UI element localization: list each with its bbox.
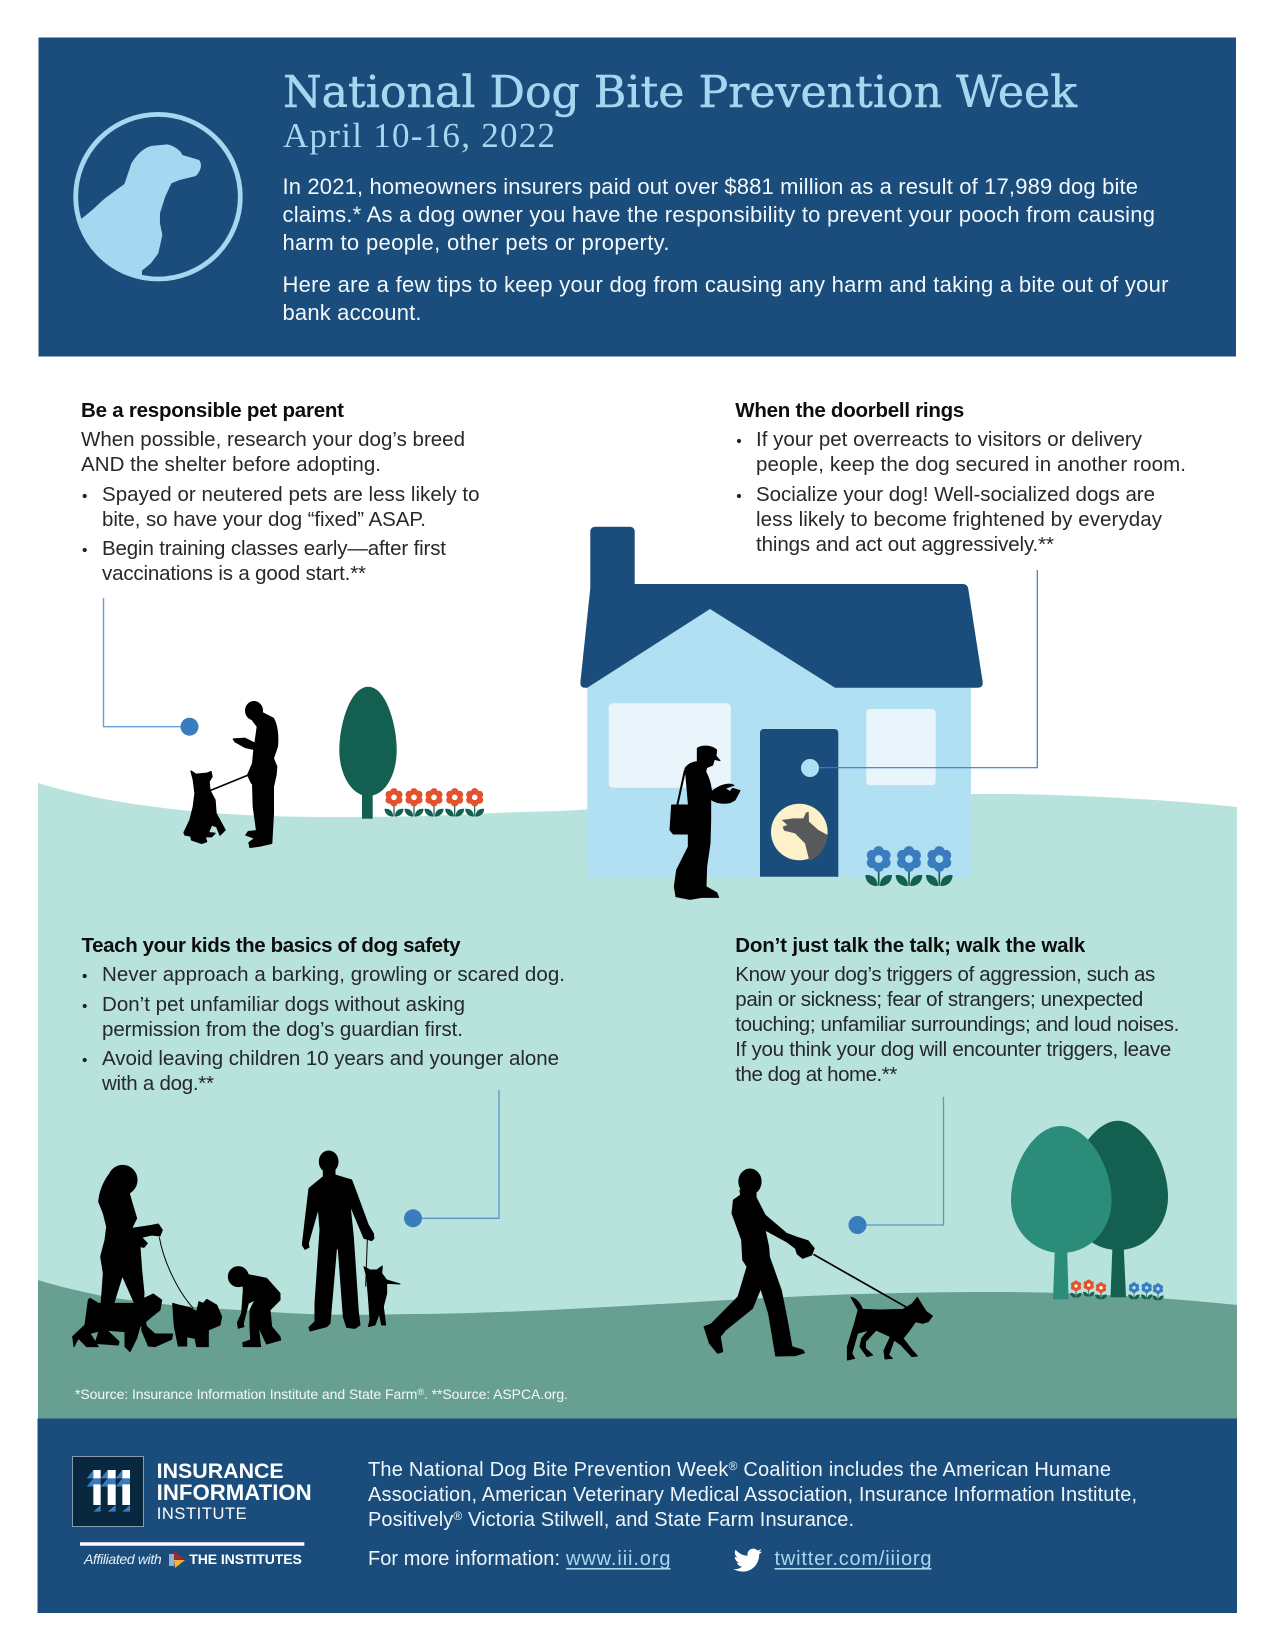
text block xyxy=(737,428,1186,556)
right window xyxy=(866,709,936,785)
child xyxy=(228,1267,281,1347)
text block: Don’t pet unfamiliar dogs without asking xyxy=(102,993,465,1016)
intro text: bank account. xyxy=(282,300,422,325)
twitter link: twitter.com/iiiorg xyxy=(774,1548,932,1570)
text block: with a dog.** xyxy=(101,1072,214,1095)
icon: red flowers xyxy=(384,788,484,817)
light green ground xyxy=(38,783,1237,1420)
text block: Spayed or neutered pets are less likely to xyxy=(102,483,480,506)
logo mark xyxy=(87,1470,130,1512)
text block: Avoid leaving children 10 years and younger alone xyxy=(102,1047,559,1070)
text block: people, keep the dog secured in another room. xyxy=(756,453,1186,476)
more information: For more information: xyxy=(368,1548,560,1570)
text block: less likely to become frightened by everyday xyxy=(756,508,1163,531)
icon: dog in circle xyxy=(76,114,240,279)
source note: ® xyxy=(417,1387,424,1397)
intro text: claims.* As a dog owner you have the responsibility to prevent your pooch from causing xyxy=(282,202,1155,227)
logo name: INSTITUTE xyxy=(157,1505,247,1523)
source note: *Source: Insurance Information Institute and State Farm xyxy=(75,1386,417,1402)
icon: house xyxy=(580,527,983,877)
text block: permission from the dog’s guardian first. xyxy=(102,1018,463,1041)
callout: doorbell xyxy=(801,570,1037,777)
date: April 10-16, 2022 xyxy=(283,116,555,155)
heading: When the doorbell rings xyxy=(735,399,964,422)
coalition text: Positively xyxy=(368,1509,453,1531)
text block: If your pet overreacts to visitors or delivery xyxy=(756,428,1143,451)
coalition text xyxy=(368,1459,1137,1531)
coalition text: The National Dog Bite Prevention Week xyxy=(368,1459,728,1481)
text block: When possible, research your dog’s breed xyxy=(81,428,465,451)
panel: teach your kids xyxy=(82,934,565,1095)
affiliation: Affiliated with xyxy=(83,1551,162,1567)
door xyxy=(760,729,838,877)
panel: header xyxy=(38,38,1236,356)
icon: two trees xyxy=(1011,1121,1168,1299)
first dog xyxy=(73,1294,162,1352)
affiliation xyxy=(80,1542,304,1568)
panel: walk the walk xyxy=(735,934,1179,1086)
coalition text: ® xyxy=(729,1459,738,1473)
coalition text: ® xyxy=(453,1509,462,1523)
icon: twitter bird xyxy=(734,1549,762,1572)
text block: touching; unfamiliar surroundings; and loud noises. xyxy=(735,1013,1179,1036)
man xyxy=(302,1151,374,1331)
panel: when the doorbell rings xyxy=(735,399,1186,556)
intro text xyxy=(282,174,1168,325)
callout: walk xyxy=(848,1097,944,1234)
intro text: Here are a few tips to keep your dog from causing any harm and taking a bite out of your xyxy=(282,272,1168,297)
roof and chimney xyxy=(580,527,983,688)
dark green ground xyxy=(38,1280,1237,1420)
text block: bite, so have your dog “fixed” ASAP. xyxy=(102,508,426,531)
intro text: In 2021, homeowners insurers paid out over $881 million as a result of 17,989 dog bite xyxy=(282,174,1138,199)
text block: Know your dog’s triggers of aggression, such as xyxy=(735,963,1155,986)
panel: be a responsible pet parent xyxy=(81,399,480,585)
text block: the dog at home.** xyxy=(735,1063,897,1086)
heading: Be a responsible pet parent xyxy=(81,399,344,422)
title: National Dog Bite Prevention Week xyxy=(283,67,1077,118)
heading: Teach your kids the basics of dog safety xyxy=(82,934,461,957)
text block: Begin training classes early—after first xyxy=(102,537,446,560)
text block xyxy=(81,428,480,585)
text block: vaccinations is a good start.** xyxy=(102,562,366,585)
heading: Don’t just talk the talk; walk the walk xyxy=(735,934,1086,957)
logo name: INFORMATION xyxy=(157,1480,312,1505)
woman xyxy=(95,1165,173,1347)
dog in door window xyxy=(771,804,828,861)
more information xyxy=(368,1548,670,1570)
logo: the institutes xyxy=(169,1551,185,1568)
left window xyxy=(609,703,731,788)
icon: family with dogs xyxy=(73,1151,400,1352)
logo: insurance information institute xyxy=(72,1456,312,1526)
more information: www.iii.org xyxy=(565,1548,670,1570)
coalition text: Victoria Stilwell, and State Farm Insurance. xyxy=(462,1509,854,1531)
text block: pain or sickness; fear of strangers; unexpected xyxy=(735,988,1143,1011)
coalition text: Association, American Veterinary Medical Association, Insurance Information Institute, xyxy=(368,1484,1137,1506)
text block: things and act out aggressively.** xyxy=(756,533,1054,556)
logo name: INSURANCE xyxy=(157,1460,284,1483)
affiliation: THE INSTITUTES xyxy=(189,1551,302,1567)
icon: man walking dog xyxy=(704,1169,932,1360)
small dog xyxy=(364,1266,400,1327)
icon: small flowers xyxy=(1070,1279,1164,1300)
icon: delivery person xyxy=(670,746,740,899)
icon: blue flowers xyxy=(865,846,953,886)
logo name xyxy=(157,1460,312,1523)
callout: pet parent xyxy=(104,598,198,736)
callout: kids xyxy=(404,1090,499,1227)
icon: man with sitting dog xyxy=(184,702,278,847)
text block: If you think your dog will encounter triggers, leave xyxy=(735,1038,1171,1061)
text block: Never approach a barking, growling or scared dog. xyxy=(102,963,565,986)
second dog xyxy=(173,1299,222,1347)
text block xyxy=(735,963,1179,1086)
text block: Socialize your dog! Well-socialized dogs are xyxy=(756,483,1155,506)
icon: tree xyxy=(339,687,397,819)
panel: footer xyxy=(38,1418,1237,1613)
source note: . **Source: ASPCA.org. xyxy=(424,1386,568,1402)
text block xyxy=(83,963,565,1095)
coalition text: Coalition includes the American Humane xyxy=(738,1459,1111,1481)
text block: AND the shelter before adopting. xyxy=(81,453,381,476)
intro text: harm to people, other pets or property. xyxy=(282,230,670,255)
